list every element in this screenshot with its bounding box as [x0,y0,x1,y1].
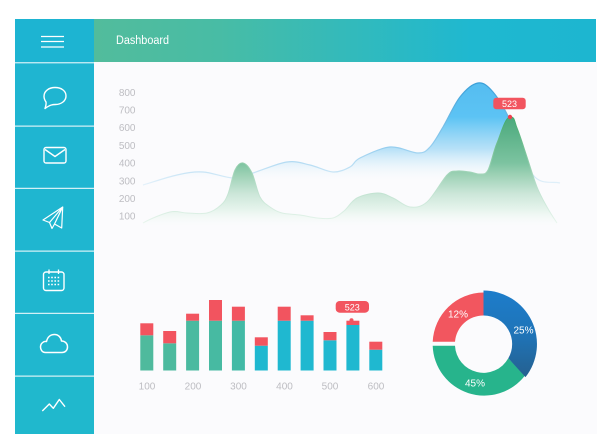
tile: mail [15,127,94,188]
x-axis labels: 400 [276,382,293,392]
callout: 523 [336,301,369,313]
bar 5 [232,307,245,370]
y-axis labels: 300 [119,176,136,188]
x-axis labels: 500 [322,382,339,392]
bar 11 [369,342,382,370]
content panel [94,62,597,434]
icon: speech bubble [44,88,66,108]
callout: 523 [493,98,526,109]
bar chart [139,300,385,392]
green area series [143,117,557,226]
segment: 12% red [433,292,484,342]
bar 7 [278,307,291,370]
y-axis labels [119,88,136,222]
y-axis labels: 200 [119,194,136,205]
heading: Dashboard: Dashboard [116,35,169,47]
label: 12%: 12% [448,310,468,320]
x-axis labels [139,382,385,392]
tile: stats [15,377,94,434]
callout: 523: 523 [345,302,360,312]
icon: zigzag line [42,400,65,411]
bar 4 [209,300,222,370]
bar 8 [301,315,314,370]
tile: messages [15,63,94,126]
x-axis labels: 100 [139,382,156,392]
icon: calendar [44,270,64,290]
callout: 523: 523 [502,99,517,109]
label: 25%: 25% [513,326,534,336]
y-axis labels: 700 [119,106,136,116]
icon: cloud [40,334,68,352]
bar 10 [346,318,359,370]
segment: 25% blue [484,290,537,377]
segment: 45% green [433,346,525,396]
blue area series [143,83,560,226]
y-axis labels: 500 [119,141,136,152]
icon: paper plane [43,207,63,228]
menu tile [15,19,94,62]
x-axis labels: 200 [185,382,202,392]
label: 45%: 45% [465,378,485,390]
donut chart [433,290,537,396]
data point marker [508,115,512,119]
bar 3 [186,314,199,370]
header bar [94,19,596,62]
sidebar [15,19,94,434]
x-axis labels: 600 [368,382,385,392]
y-axis labels: 600 [119,123,136,134]
y-axis labels: 100 [119,212,136,222]
bar 6 [255,337,268,370]
tile: calendar [15,252,94,313]
y-axis labels: 800 [119,88,136,99]
icon: envelope [44,148,66,163]
x-axis labels: 300 [230,382,247,392]
bar 2 [163,331,176,370]
bar 1 [140,323,153,370]
icon: hamburger menu [41,36,64,47]
area chart [119,83,560,226]
y-axis labels: 400 [119,158,136,170]
tile: send [15,189,94,251]
bar 9 [324,332,336,370]
tile: cloud [15,314,94,376]
